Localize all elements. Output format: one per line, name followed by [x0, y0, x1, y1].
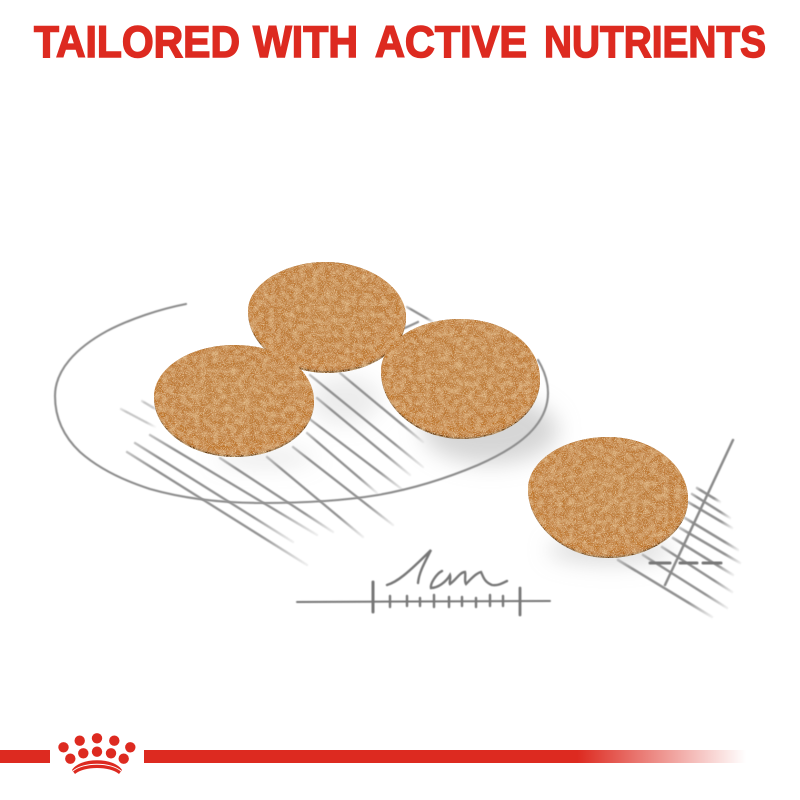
size scale: 1 cm ruler [297, 550, 550, 615]
logo: crown [58, 733, 135, 774]
title: WITH [253, 18, 358, 67]
handwritten 1 cm mark [387, 550, 507, 588]
footer rule: left segment [0, 750, 50, 763]
footer rule: right fading segment [144, 750, 746, 763]
sketch: hatching under plate kibbles [121, 307, 433, 565]
sketch: hatching under single kibble [618, 440, 740, 617]
title: TAILORED [34, 18, 240, 67]
kibble: single [528, 437, 688, 558]
title [34, 18, 766, 67]
title: ACTIVE [375, 18, 527, 67]
title: NUTRIENTS [544, 18, 766, 67]
kibble: right [381, 319, 540, 439]
kibble: left [154, 345, 314, 457]
kibble: top [248, 262, 406, 373]
sketch: plate ellipse [55, 304, 548, 503]
soft kibble shadows [215, 376, 672, 564]
